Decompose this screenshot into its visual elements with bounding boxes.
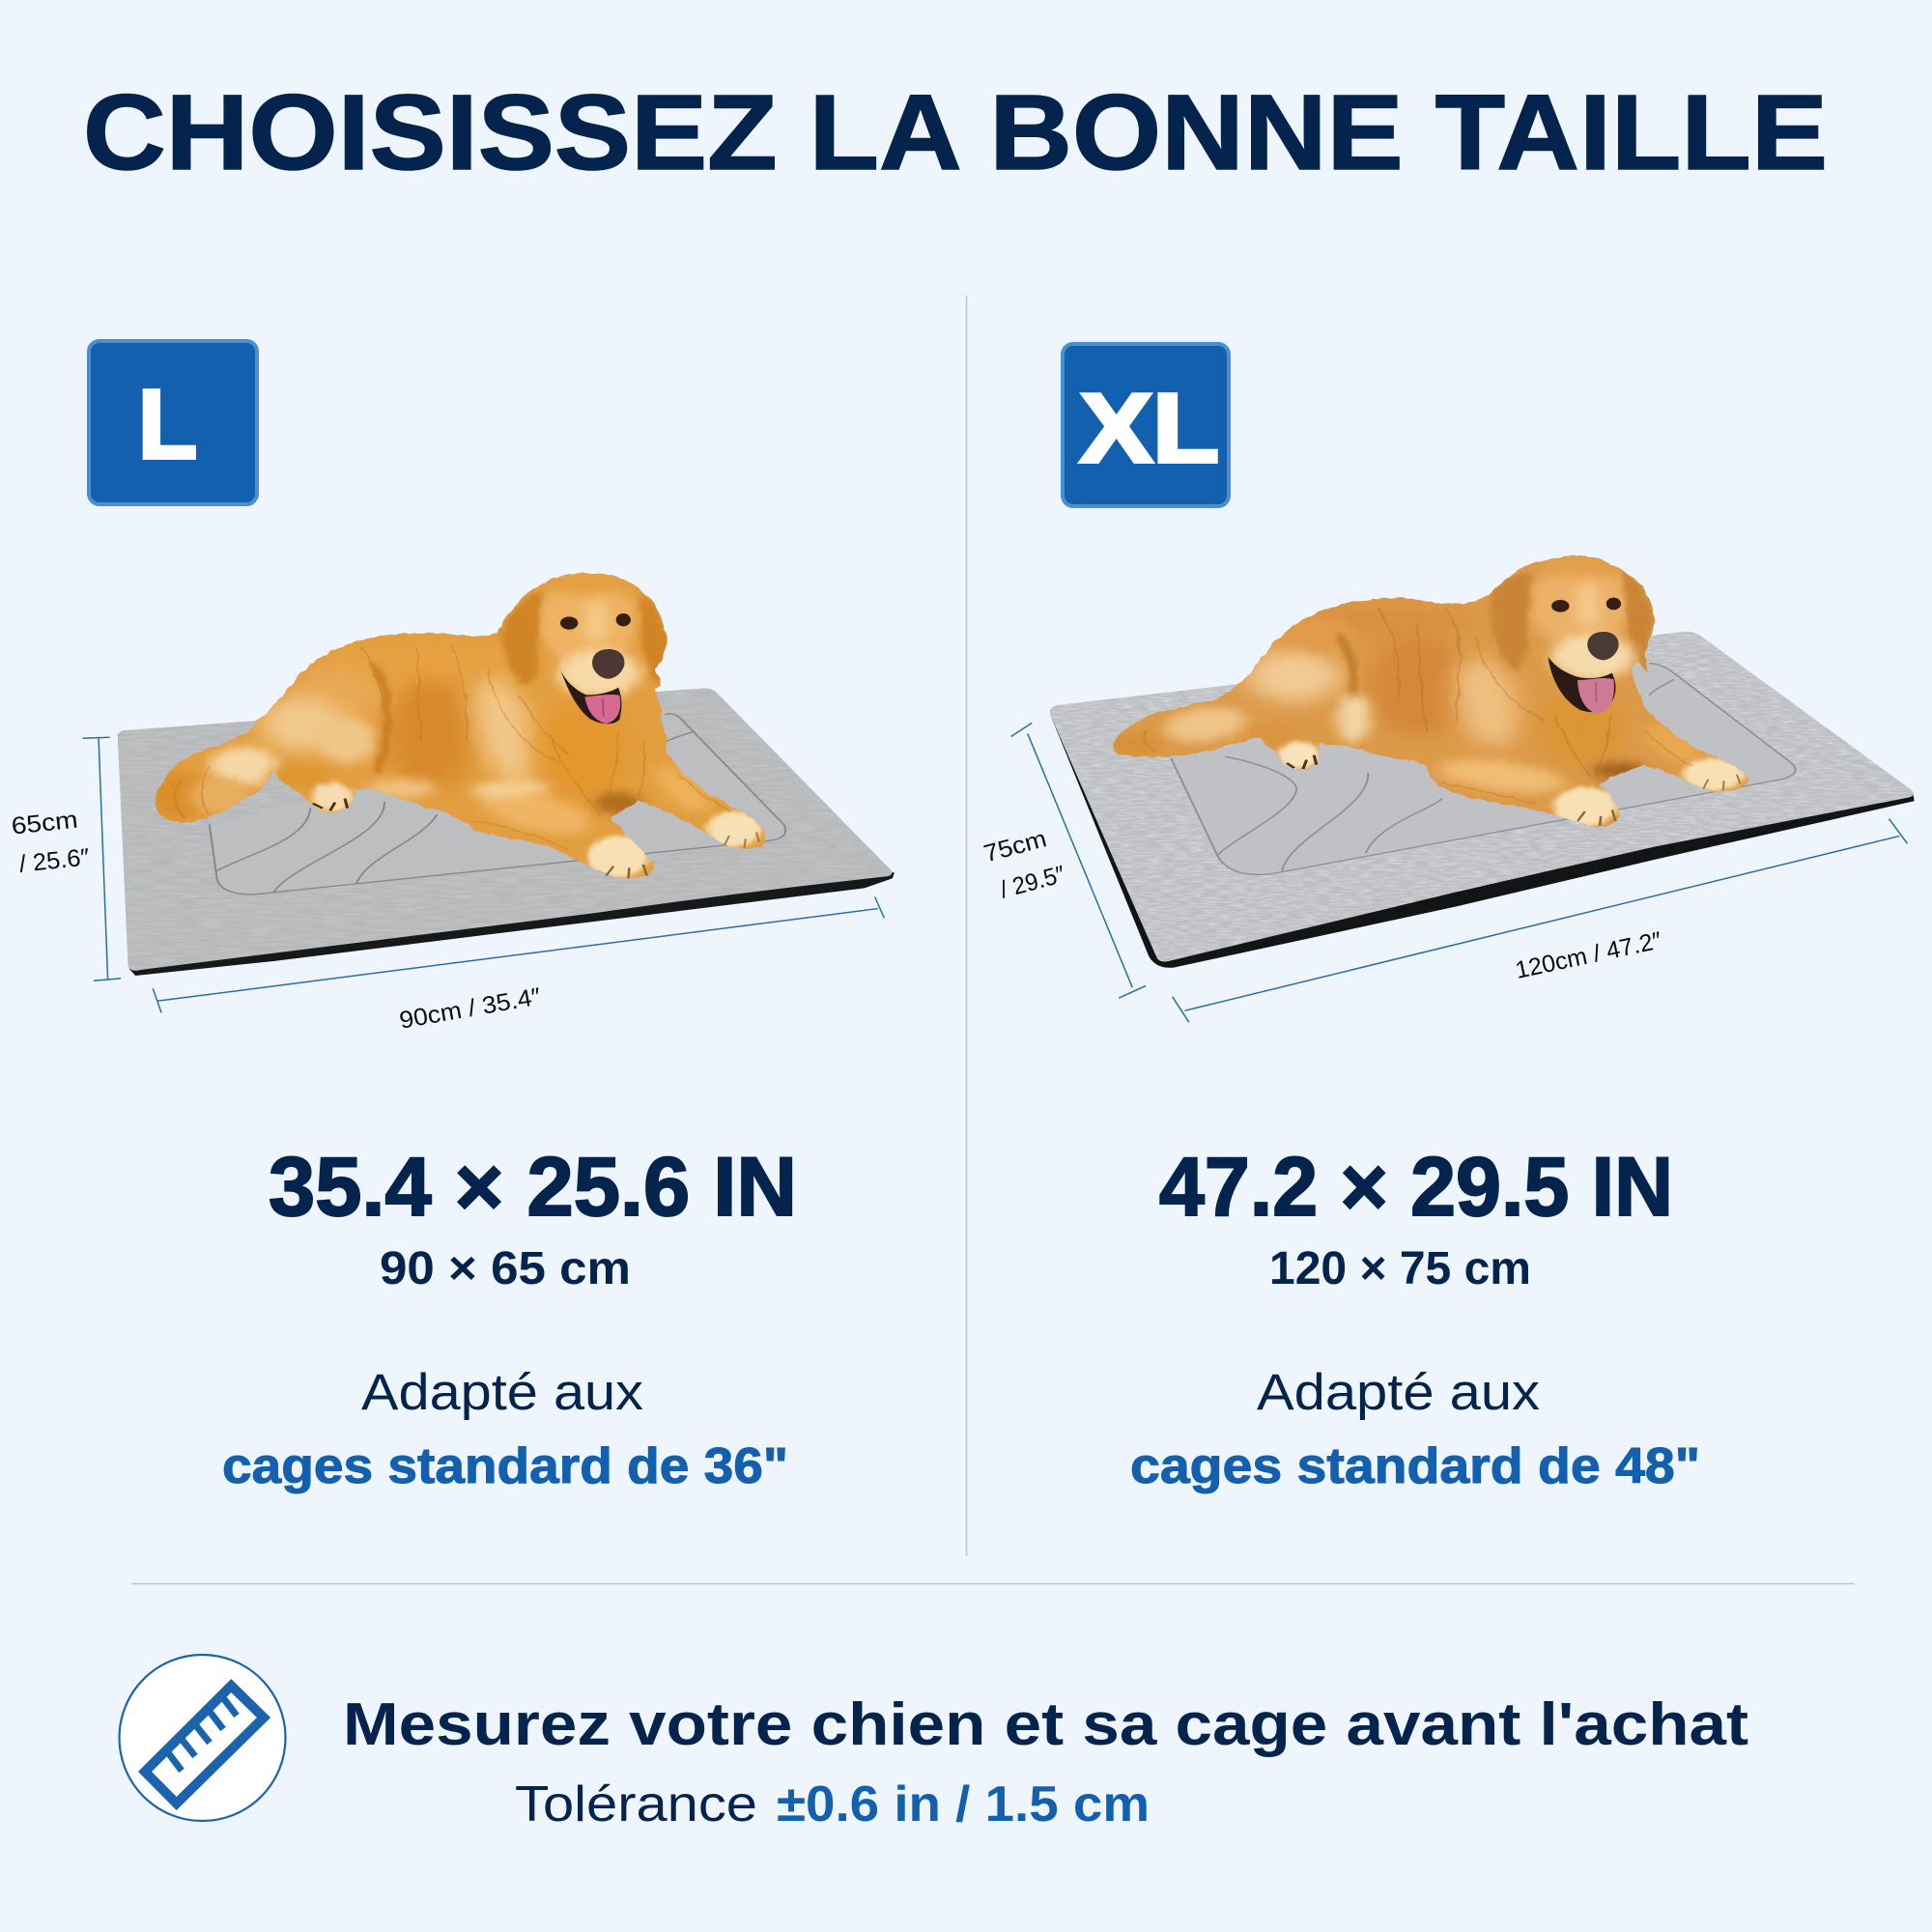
size badge: L: L (138, 371, 197, 479)
dimension label 75cm: 75cm (980, 825, 1049, 867)
dimension lines L (82, 737, 884, 1012)
dimension label 25.6: / 25.6″ (17, 843, 91, 878)
size badge: XL: XL (1080, 375, 1219, 483)
fit highlight L: cages standard de 36" (222, 1438, 788, 1494)
icon: ruler in circle (120, 1655, 286, 1821)
size XL inches: 47.2 × 29.5 IN (1159, 1141, 1673, 1234)
dog L (151, 572, 766, 878)
mat XL (1050, 632, 1915, 968)
dimension label 29.5: / 29.5″ (997, 861, 1068, 904)
dimension label 90cm: 90cm / 35.4″ (397, 982, 543, 1035)
fit text L: Adapté aux (361, 1364, 643, 1421)
size L centimetres: 90 × 65 cm (380, 1243, 631, 1294)
dog XL (1109, 555, 1747, 827)
size badge: XL (1063, 344, 1229, 506)
footer tolerance value: ±0.6 in / 1.5 cm (777, 1776, 1150, 1833)
fit text XL: Adapté aux (1257, 1364, 1540, 1421)
footer tolerance label: Tolérance (515, 1776, 757, 1833)
product image: XL mat with dog and dimensions (980, 555, 1915, 1022)
footer heading: Mesurez votre chien et sa cage avant l'achat (343, 1691, 1748, 1758)
size XL centimetres: 120 × 75 cm (1269, 1243, 1531, 1294)
dimension label 65cm: 65cm (10, 807, 79, 840)
mat L (118, 689, 895, 976)
dog XL face and paw details (1287, 598, 1741, 826)
dimension lines XL (1011, 723, 1908, 1022)
dimension label 120cm: 120cm / 47.2″ (1513, 926, 1664, 984)
dog L face and paw details (313, 613, 759, 878)
artwork L (118, 572, 895, 976)
size badge: L (89, 341, 257, 504)
product image: L mat with dog and dimensions (10, 572, 895, 1035)
title: CHOISISSEZ LA BONNE TAILLE (83, 73, 1828, 192)
fit highlight XL: cages standard de 48" (1130, 1438, 1700, 1494)
size L inches: 35.4 × 25.6 IN (269, 1141, 797, 1234)
artwork XL (1050, 555, 1915, 968)
